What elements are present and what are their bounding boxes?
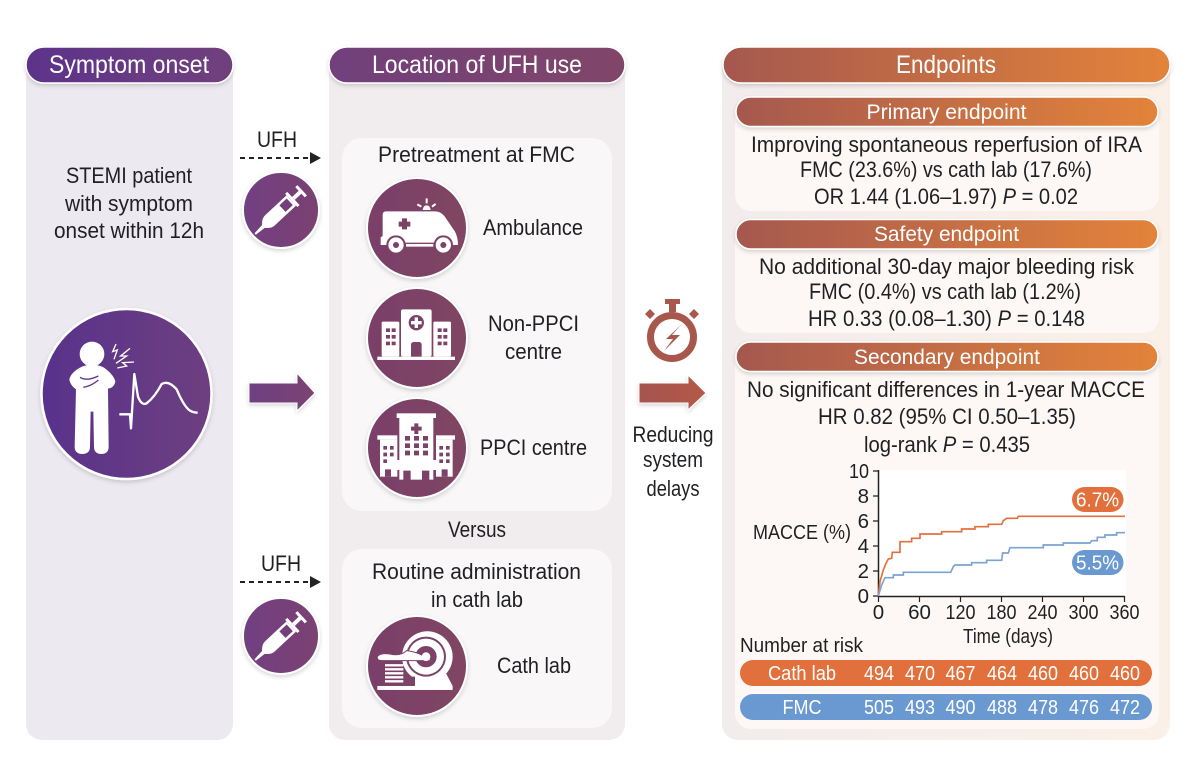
row: FMC numbers at risk: 476 — [1069, 696, 1099, 719]
row: cath lab numbers at risk: 460 — [1069, 662, 1099, 685]
row: cath lab numbers at risk: Cath lab — [768, 662, 836, 685]
row: FMC numbers at risk: 493 — [905, 696, 935, 719]
text: secondary endpoint result — [747, 377, 1145, 457]
text: safety endpoint result: No additional 30-day major bleeding risk — [759, 254, 1135, 279]
x axis labels — [873, 601, 1140, 624]
heading: symptom onset: Symptom onset — [49, 51, 209, 79]
label: number at risk: Number at risk — [740, 634, 864, 657]
y axis title: MACCE (%) — [753, 521, 851, 544]
y axis labels: 8 — [858, 485, 869, 508]
row: cath lab numbers at risk: 460 — [1028, 662, 1058, 685]
pill: primary endpoint — [736, 97, 1158, 126]
panel: location of UFH use — [329, 47, 625, 740]
pill: safety endpoint: Safety endpoint — [874, 223, 1019, 246]
chart: MACCE Kaplan-Meier curves — [753, 460, 1140, 648]
heading: symptom onset — [26, 47, 233, 83]
y axis labels: 2 — [858, 560, 869, 583]
x axis labels: 360 — [1110, 601, 1140, 624]
x axis labels: 60 — [908, 601, 931, 624]
row: cath lab numbers at risk: 467 — [946, 662, 976, 685]
section: safety endpoint — [735, 220, 1159, 333]
pill: safety endpoint — [736, 220, 1158, 249]
pill: secondary endpoint: Secondary endpoint — [854, 346, 1040, 369]
row: cath lab numbers at risk: 470 — [905, 662, 935, 685]
y axis labels — [849, 460, 869, 608]
section: primary endpoint — [735, 97, 1159, 211]
subheading: routine administration: in cath lab — [431, 587, 523, 612]
text: secondary endpoint result: log-rank P = 0.435 — [864, 432, 1030, 457]
text: STEMI patient description — [54, 163, 204, 243]
x axis labels: 240 — [1028, 601, 1058, 624]
row: cath lab numbers at risk: 464 — [987, 662, 1017, 685]
icon: stopwatch — [645, 299, 699, 358]
y axis labels: 0 — [858, 585, 869, 608]
icon: ambulance — [367, 178, 467, 278]
subheading: routine administration — [372, 559, 581, 612]
label: UFH lower: UFH — [261, 551, 301, 576]
heading: endpoints — [723, 47, 1170, 83]
icon: non-PPCI hospital — [367, 288, 467, 388]
text: safety endpoint result: FMC (0.4%) vs cath lab (1.2%) — [809, 279, 1081, 304]
row: FMC numbers at risk — [740, 694, 1152, 720]
x axis labels: 0 — [873, 601, 884, 624]
icon: syringe upper — [243, 172, 319, 248]
curve: cath lab — [878, 516, 1125, 596]
label: non-PPCI centre: centre — [505, 339, 562, 364]
row: FMC numbers at risk: 488 — [987, 696, 1017, 719]
subheading: pretreatment at FMC: Pretreatment at FMC — [378, 142, 575, 167]
text: safety endpoint result — [759, 254, 1135, 331]
heading: endpoints: Endpoints — [896, 51, 996, 79]
x axis labels: 300 — [1068, 601, 1098, 624]
row: FMC numbers at risk: 478 — [1028, 696, 1058, 719]
text: STEMI patient description: with symptom — [64, 191, 193, 216]
text: primary endpoint result: Improving spontaneous reperfusion of IRA — [751, 132, 1142, 157]
label: non-PPCI centre: Non-PPCI — [488, 311, 579, 336]
heading: location of UFH use — [329, 47, 625, 83]
row: FMC numbers at risk: 472 — [1110, 696, 1140, 719]
arrow: location to endpoints — [639, 375, 706, 410]
label: PPCI centre: PPCI centre — [480, 435, 587, 460]
text: STEMI patient description: onset within 12h — [54, 218, 204, 243]
row: FMC numbers at risk: FMC — [782, 696, 822, 719]
row: FMC numbers at risk: 490 — [946, 696, 976, 719]
icon: PPCI hospital — [367, 398, 467, 498]
row: cath lab numbers at risk: 460 — [1110, 662, 1140, 685]
text: STEMI patient description: STEMI patient — [66, 163, 192, 188]
text: reducing system delays — [632, 422, 714, 501]
label: cath lab: Cath lab — [497, 653, 571, 678]
heading: location of UFH use: Location of UFH use — [372, 51, 582, 79]
text: primary endpoint result: OR 1.44 (1.06–1.97) P = 0.02 — [814, 184, 1078, 209]
row: FMC numbers at risk: 505 — [864, 696, 894, 719]
y axis labels: 4 — [858, 535, 869, 558]
row: cath lab numbers at risk: 494 — [864, 662, 894, 685]
text: primary endpoint result — [751, 132, 1142, 209]
label: UFH upper: UFH — [257, 127, 297, 152]
subheading: routine administration: Routine administration — [372, 559, 581, 584]
icon: patient with chest pain and ECG — [42, 309, 212, 479]
text: reducing system delays: system — [643, 447, 703, 472]
arrow: symptom onset to location — [249, 373, 315, 411]
text: secondary endpoint result: HR 0.82 (95% CI 0.50–1.35) — [818, 404, 1076, 429]
pill: primary endpoint: Primary endpoint — [866, 101, 1027, 124]
icon: cath lab scanner — [367, 616, 467, 716]
y axis labels: 10 — [849, 460, 869, 483]
y axis labels: 6 — [858, 510, 869, 533]
label: non-PPCI centre — [488, 311, 579, 364]
arrow: dashed UFH lower — [240, 576, 321, 588]
section: secondary endpoint — [735, 342, 1159, 729]
label: cath lab 6.7%: 6.7% — [1076, 488, 1119, 512]
panel: pretreatment at FMC — [342, 138, 612, 511]
x axis labels: 120 — [946, 601, 976, 624]
label: versus: Versus — [448, 517, 506, 542]
text: safety endpoint result: HR 0.33 (0.08–1.30) P = 0.148 — [808, 306, 1085, 331]
text: reducing system delays: Reducing — [632, 422, 714, 447]
panel: endpoints — [722, 47, 1170, 740]
curve: FMC — [878, 533, 1125, 596]
pill: secondary endpoint — [736, 342, 1158, 372]
panel: routine administration in cath lab — [342, 549, 612, 728]
x axis labels: 180 — [986, 601, 1016, 624]
text: reducing system delays: delays — [646, 476, 700, 501]
icon: syringe lower — [243, 598, 319, 674]
label: FMC 5.5%: 5.5% — [1076, 552, 1119, 574]
label: ambulance: Ambulance — [483, 215, 583, 240]
arrow: dashed UFH upper — [240, 152, 321, 164]
x axis title: Time (days) — [963, 625, 1053, 648]
row: cath lab numbers at risk — [740, 660, 1152, 686]
text: primary endpoint result: FMC (23.6%) vs cath lab (17.6%) — [800, 157, 1092, 182]
panel: symptom onset — [26, 47, 233, 740]
text: secondary endpoint result: No significant differences in 1-year MACCE — [747, 377, 1145, 402]
